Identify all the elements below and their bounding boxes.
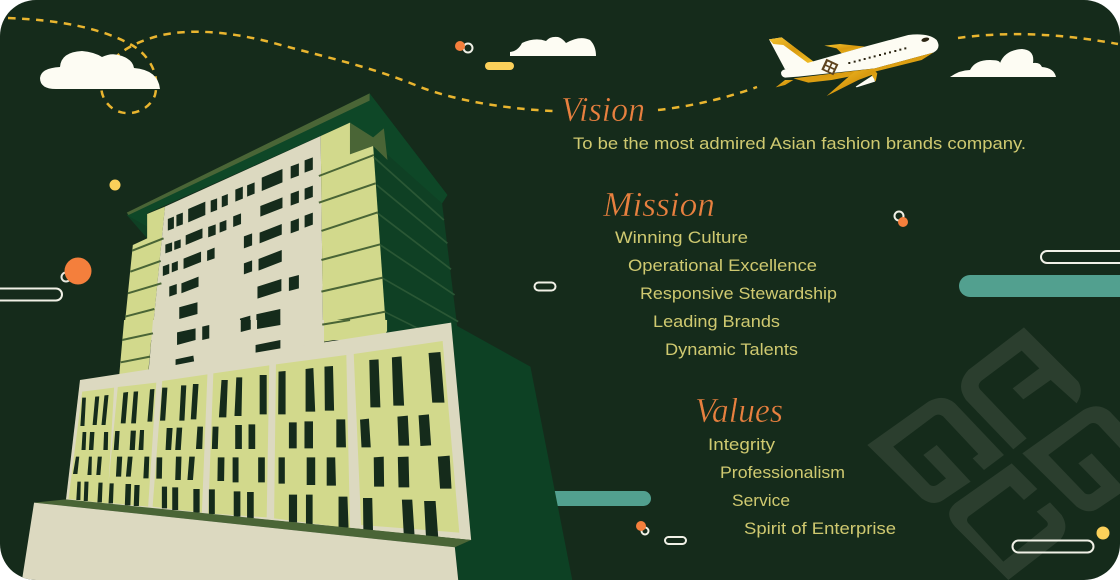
tower right band bbox=[321, 123, 387, 340]
lower block side wall bbox=[451, 323, 572, 580]
mission list: Operational Excellence bbox=[628, 256, 817, 275]
mission list: Responsive Stewardship bbox=[640, 284, 837, 303]
values list: Integrity bbox=[708, 435, 776, 454]
dashed flight path right bbox=[958, 34, 1118, 44]
tower floor lines bbox=[123, 155, 386, 338]
tower windows bbox=[162, 157, 313, 320]
building upper tower bbox=[123, 93, 459, 340]
building bbox=[21, 93, 572, 580]
heading: Mission: Mission bbox=[602, 185, 715, 224]
tower centre bbox=[154, 136, 323, 320]
lower tower continuation bbox=[119, 320, 387, 377]
building lower block bbox=[21, 320, 572, 580]
dashed flight path left bbox=[8, 18, 553, 113]
cloud right bbox=[950, 49, 1056, 77]
mission list: Leading Brands bbox=[653, 312, 780, 331]
airplane bbox=[769, 34, 939, 96]
roof edge bbox=[127, 93, 370, 215]
mission list bbox=[615, 228, 837, 359]
podium base bbox=[21, 503, 459, 580]
tower side and roof bbox=[128, 146, 457, 332]
mission list: Winning Culture bbox=[615, 228, 748, 247]
facade windows bbox=[73, 352, 452, 537]
watermark logo bbox=[867, 327, 1120, 580]
values list: Professionalism bbox=[720, 463, 845, 482]
heading: Vision: Vision bbox=[561, 90, 645, 129]
lower block facade bbox=[66, 323, 471, 540]
podium ledge bbox=[34, 499, 471, 547]
cloud left bbox=[40, 51, 160, 89]
tower left strip bbox=[123, 207, 165, 340]
values list bbox=[708, 435, 896, 538]
values list: Spirit of Enterprise bbox=[744, 519, 896, 538]
dashed flight path middle bbox=[658, 87, 757, 110]
tower side lines bbox=[374, 157, 458, 328]
values list: Service bbox=[732, 491, 790, 510]
mission list: Dynamic Talents bbox=[665, 340, 798, 359]
roof lip bbox=[147, 94, 448, 214]
cloud middle bbox=[510, 37, 596, 56]
facade panels bbox=[69, 341, 459, 533]
roof logo bbox=[350, 123, 387, 160]
heading: Values: Values bbox=[695, 391, 783, 430]
vision statement: To be the most admired Asian fashion brands company. bbox=[573, 134, 1026, 153]
